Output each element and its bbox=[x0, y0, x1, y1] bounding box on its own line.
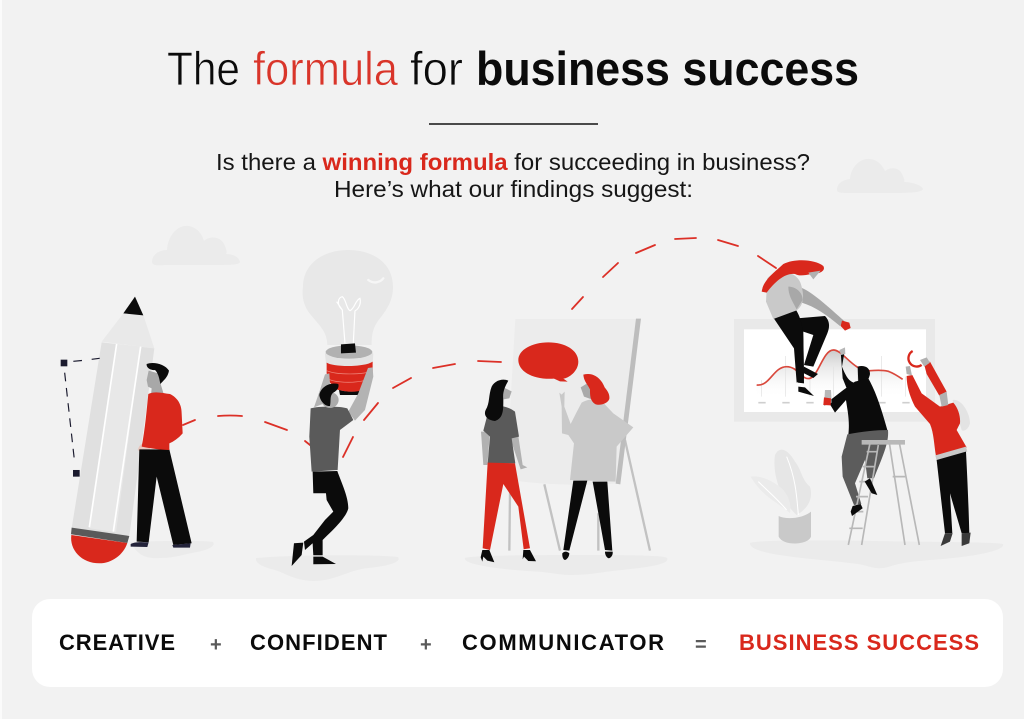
label: creative: CREATIVE bbox=[59, 630, 175, 655]
flip chart bbox=[506, 319, 650, 551]
title: The bbox=[167, 42, 240, 95]
formula panel bbox=[32, 599, 1003, 687]
dashed success path bbox=[183, 238, 776, 457]
icon: step ladder bbox=[848, 440, 919, 545]
floor shadows bbox=[130, 540, 1003, 581]
plus sign: + bbox=[420, 634, 432, 656]
figure: creative pencil and man bbox=[61, 250, 393, 566]
label: business success: BUSINESS SUCCESS bbox=[739, 630, 979, 655]
cloud left bbox=[152, 226, 240, 265]
person: man holding bulb bbox=[292, 367, 373, 566]
person: man in red sweater bbox=[131, 363, 192, 548]
subtitle: Here’s what our findings suggest: bbox=[334, 176, 693, 202]
person: woman jumping above chart bbox=[762, 260, 851, 396]
icon: dashed selection handles bbox=[61, 358, 100, 477]
plus sign: + bbox=[210, 634, 222, 656]
person: ladder man's shoes bbox=[851, 478, 877, 516]
person: woman holding red ring bbox=[906, 351, 971, 546]
person: woman in red trousers bbox=[481, 380, 536, 562]
label: confident: CONFIDENT bbox=[250, 630, 388, 655]
icon: potted plant bbox=[751, 450, 811, 544]
chart board bbox=[734, 319, 935, 422]
speech bubble bbox=[518, 342, 578, 382]
subtitle bbox=[216, 149, 810, 202]
title: business success bbox=[476, 42, 859, 95]
subtitle: Is there a winning formula for succeeding in business? bbox=[216, 149, 810, 175]
label: communicator: COMMUNICATOR bbox=[462, 630, 664, 655]
icon: light bulb bbox=[303, 250, 393, 395]
figure: business team with chart bbox=[734, 260, 971, 546]
person: woman with red hair bbox=[559, 374, 633, 560]
icon: pencil bbox=[71, 297, 154, 563]
equals sign: = bbox=[695, 634, 707, 656]
person: man on ladder bbox=[823, 347, 888, 505]
figure: communicators at flip chart bbox=[481, 319, 650, 562]
title: formula bbox=[253, 42, 399, 95]
title bbox=[167, 42, 859, 95]
title: for bbox=[410, 42, 463, 95]
cloud right bbox=[837, 159, 923, 193]
